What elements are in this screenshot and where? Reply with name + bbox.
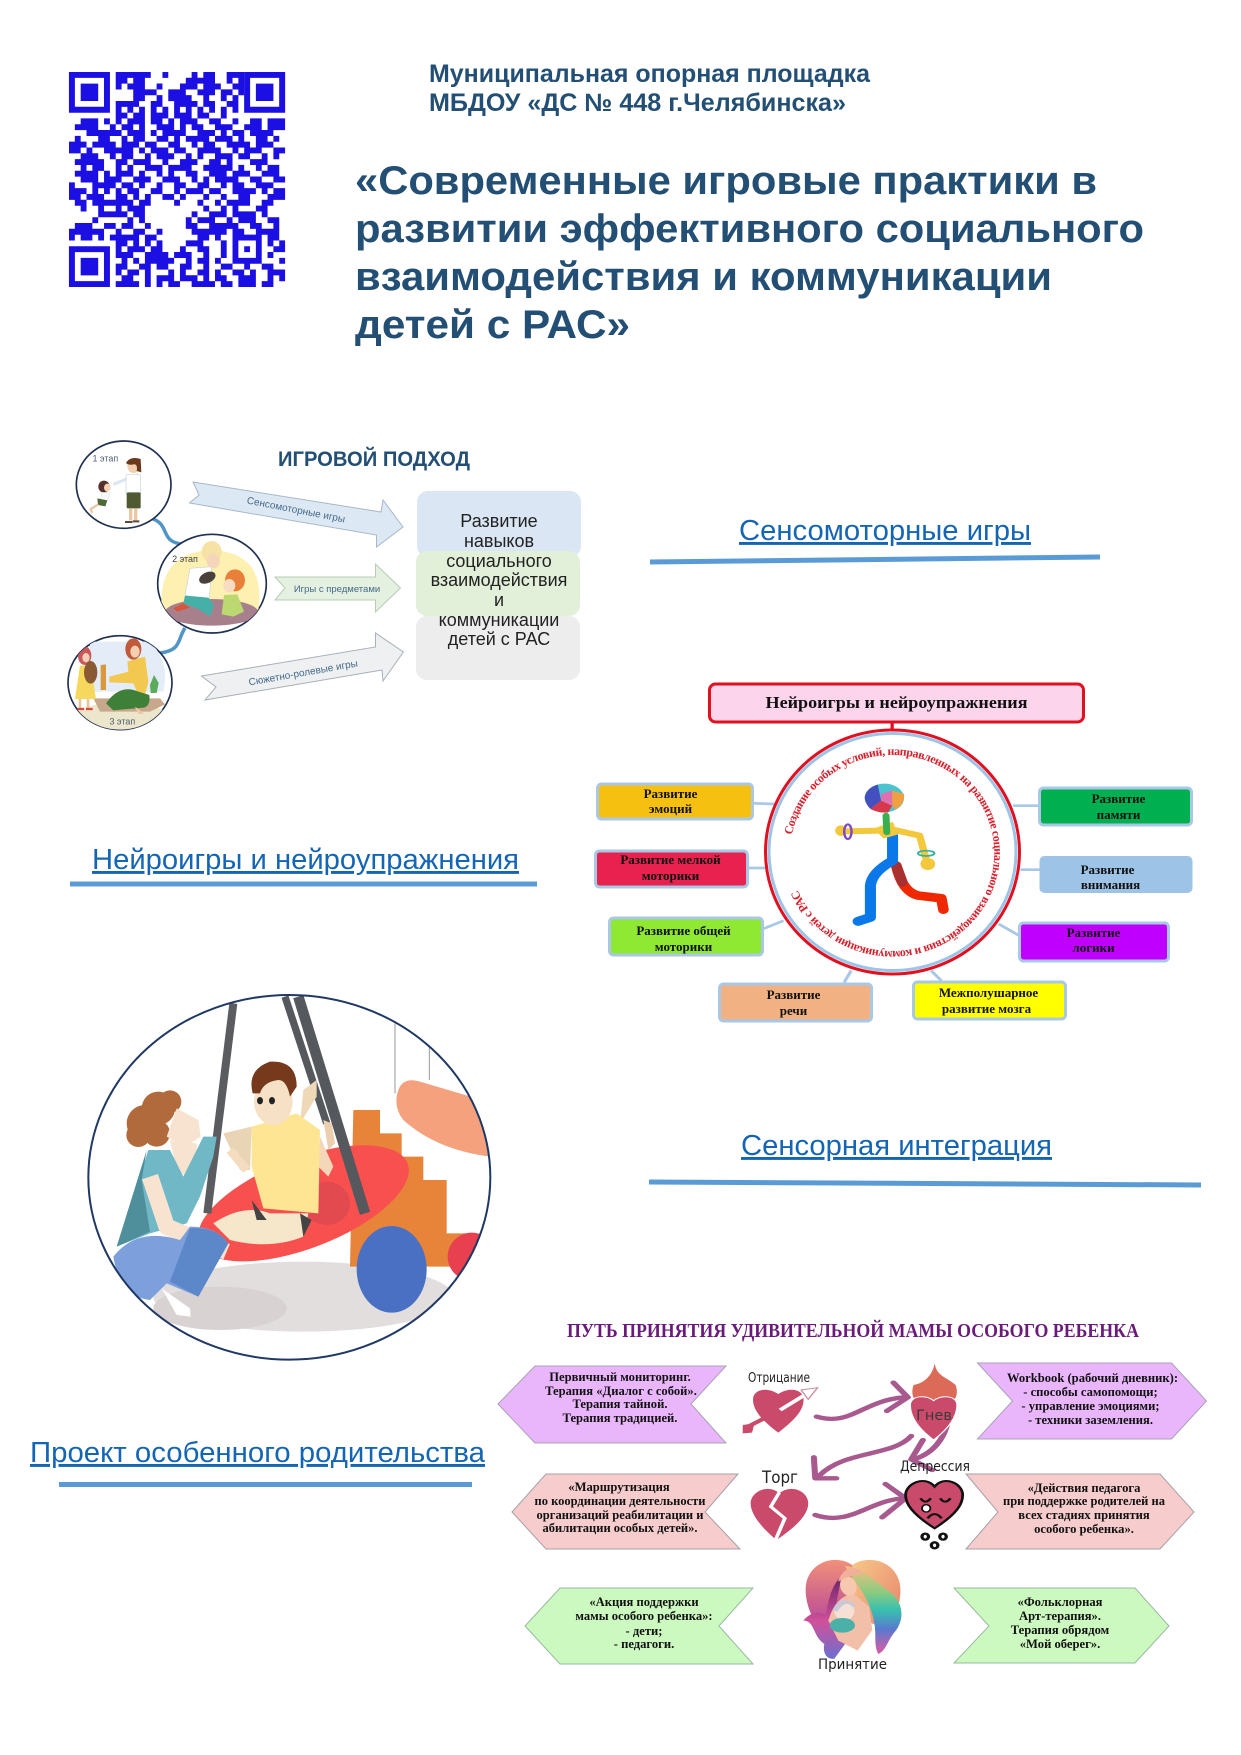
arrows between stages	[814, 1383, 948, 1518]
organisation heading: МБДОУ «ДС № 448 г.Челябинска»	[429, 89, 846, 117]
icon: denial heart with arrow: Отрицание	[748, 1371, 810, 1386]
title: детей с РАС»	[355, 303, 630, 347]
box: interhemispheric: Межполушарное	[939, 985, 1038, 1000]
stage 3 circle	[68, 636, 172, 730]
callout: monitoring: Терапия традицией.	[563, 1411, 677, 1425]
box: speech: речи	[780, 1003, 808, 1018]
outcome boxes: коммуникации	[439, 610, 559, 630]
title: взаимодействия и коммуникации	[355, 255, 1052, 299]
callout: routing: по координации деятельности	[534, 1494, 706, 1508]
callout: routing: «Маршрутизация	[568, 1480, 670, 1494]
heading: game approach: ИГРОВОЙ ПОДХОД	[278, 447, 470, 471]
callout: routing	[512, 1474, 740, 1549]
icon: denial heart with arrow	[743, 1371, 818, 1433]
arrow: games with objects	[275, 564, 400, 612]
QR code	[69, 72, 285, 287]
callout: folk art therapy: «Фольклорная	[1018, 1595, 1103, 1609]
icon: bargaining broken heart: Торг	[761, 1468, 798, 1488]
box: interhemispheric: развитие мозга	[942, 1001, 1032, 1016]
underline bar	[59, 1482, 472, 1487]
icon: mother and child (acceptance)	[803, 1560, 901, 1673]
box: emotions: Развитие	[644, 786, 698, 801]
arrow: sensorimotor games: Сенсомоторные игры	[246, 496, 346, 525]
callout: support campaign	[525, 1588, 753, 1664]
callout: folk art therapy	[954, 1588, 1169, 1663]
box: logic	[1020, 923, 1168, 961]
callout: workbook: - техники заземления.	[1028, 1413, 1153, 1427]
arrow: role-play games	[202, 633, 403, 700]
callout: workbook: - управление эмоциями;	[1021, 1399, 1160, 1413]
outcome boxes: Развитие	[460, 511, 538, 531]
icon: anger heart	[910, 1363, 957, 1440]
outcome boxes: и	[494, 590, 504, 610]
box: memory	[1040, 788, 1192, 825]
illustration: sensory swing	[88, 995, 496, 1360]
callout: support campaign: мамы особого ребенка»:	[575, 1609, 713, 1623]
box: attention: Развитие	[1081, 862, 1135, 877]
label: stage 2: 2 этап	[172, 554, 198, 564]
callout: workbook	[978, 1363, 1206, 1439]
outcome boxes: взаимодействия	[431, 570, 567, 590]
callout: monitoring	[498, 1366, 726, 1443]
box: attention	[1040, 856, 1192, 893]
underline bar	[649, 1182, 1201, 1185]
section link: parenting project: Проект особенного родительства	[30, 1437, 486, 1469]
underline bar	[70, 882, 537, 886]
section link: sensory integration: Сенсорная интеграция	[741, 1130, 1052, 1162]
callout: folk art therapy: «Мой оберег».	[1020, 1637, 1100, 1651]
box: fine motor skills	[596, 851, 748, 887]
jigsaw head	[865, 784, 904, 813]
title: «Современные игровые практики в	[355, 159, 1097, 203]
box: interhemispheric	[914, 982, 1066, 1019]
callout: support campaign: «Акция поддержки	[589, 1595, 699, 1609]
central circle	[764, 728, 1021, 976]
callout: teacher actions	[966, 1474, 1194, 1549]
callout: monitoring: Терапия тайной.	[573, 1397, 667, 1411]
underline bar	[650, 557, 1100, 562]
arrow: games with objects: Игры с предметами	[294, 584, 380, 595]
callout: folk art therapy: Терапия обрядом	[1011, 1623, 1110, 1637]
section link: sensorimotor games: Сенсомоторные игры	[739, 515, 1031, 547]
box: gross motor skills: моторики	[655, 939, 713, 954]
box: emotions: эмоций	[649, 801, 693, 816]
box: logic: Развитие	[1067, 925, 1121, 940]
outcome boxes: социального	[446, 551, 552, 571]
curved caption: Создание особых условий, направленных на развитие социального взаимодействия и коммуникации детей с РАС	[785, 747, 1000, 957]
box: fine motor skills: Развитие мелкой	[620, 852, 721, 867]
callout: workbook: - способы самопомощи;	[1023, 1385, 1158, 1399]
outcome boxes: детей с РАС	[448, 629, 550, 649]
organisation heading	[429, 60, 871, 117]
callout: teacher actions: особого ребенка».	[1034, 1522, 1134, 1536]
organisation heading: Муниципальная опорная площадка	[429, 60, 871, 88]
arrow: sensorimotor games	[190, 482, 403, 547]
icon: depression heart: Депрессия	[900, 1459, 970, 1475]
callout: monitoring: Первичный мониторинг.	[549, 1370, 691, 1384]
label: acceptance: Принятие	[818, 1657, 887, 1673]
box: speech	[720, 984, 872, 1021]
callout: routing: организаций реабилитации и	[536, 1508, 704, 1522]
callout: support campaign: - дети;	[626, 1624, 662, 1638]
title: развитии эффективного социального	[355, 207, 1144, 251]
title	[355, 159, 1144, 347]
connectors	[748, 721, 1040, 982]
outcome boxes: навыков	[464, 531, 534, 551]
header box	[710, 684, 1084, 722]
box: fine motor skills: моторики	[642, 868, 700, 883]
panel: mother's path of acceptance	[498, 1319, 1206, 1673]
callout: teacher actions: всех стадиях принятия	[1018, 1508, 1150, 1522]
box: attention: внимания	[1081, 877, 1140, 892]
box: speech: Развитие	[767, 987, 821, 1002]
callout: workbook: Workbook (рабочий дневник):	[1007, 1371, 1178, 1385]
callout: routing: абилитации особых детей».	[542, 1521, 698, 1535]
box: memory: Развитие	[1092, 791, 1146, 806]
stage 2 circle	[158, 534, 266, 633]
icon: anger heart: Гнев	[916, 1408, 952, 1424]
box: emotions	[598, 784, 752, 819]
stage 1 circle	[76, 441, 171, 528]
box: gross motor skills: Развитие общей	[636, 923, 731, 938]
callout: teacher actions: при поддержке родителей на	[1003, 1494, 1166, 1508]
panel: neuro games diagram	[594, 682, 1193, 1022]
running figure	[835, 784, 943, 921]
outcome boxes	[416, 491, 581, 680]
box: logic: логики	[1072, 940, 1115, 955]
callout: folk art therapy: Арт-терапия».	[1019, 1609, 1101, 1623]
label: stage 3: 3 этап	[109, 716, 135, 726]
connectors between stages	[153, 519, 185, 653]
box: gross motor skills	[610, 918, 762, 955]
icon: depression heart	[900, 1459, 970, 1548]
callout: monitoring: Терапия «Диалог с собой».	[545, 1384, 697, 1398]
box: memory: памяти	[1097, 807, 1141, 822]
panel: game approach diagram	[68, 441, 581, 730]
section link: neuro games: Нейроигры и нейроупражнения	[92, 844, 519, 876]
label: stage 1: 1 этап	[92, 453, 118, 463]
callout: teacher actions: «Действия педагога	[1028, 1481, 1141, 1495]
callout: support campaign: - педагоги.	[614, 1637, 674, 1651]
header box: Нейроигры и нейроупражнения	[766, 693, 1028, 712]
heading: path of acceptance: ПУТЬ ПРИНЯТИЯ УДИВИТЕЛЬНОЙ МАМЫ ОСОБОГО РЕБЕНКА	[567, 1319, 1139, 1342]
icon: bargaining broken heart	[751, 1468, 808, 1540]
arrow: role-play games: Сюжетно-ролевые игры	[248, 658, 359, 689]
